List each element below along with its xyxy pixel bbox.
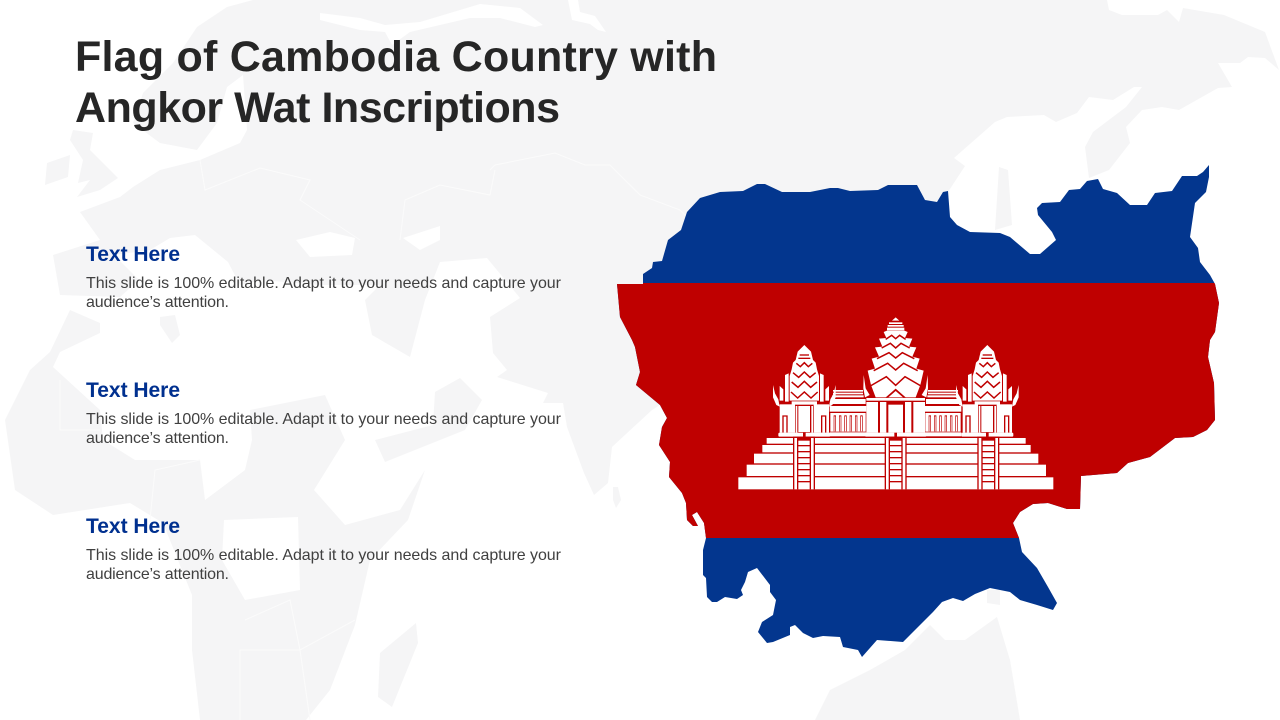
title	[75, 33, 717, 132]
icon: Angkor Wat temple	[738, 317, 1053, 489]
temple steps	[738, 438, 1053, 489]
title: Angkor Wat Inscriptions	[75, 84, 560, 132]
staircases	[793, 437, 815, 489]
text block 2: This slide is 100% editable. Adapt it to your needs and capture your	[86, 411, 562, 428]
text block 3	[86, 515, 562, 583]
white seas and borders	[60, 0, 720, 720]
text block 3: This slide is 100% editable. Adapt it to your needs and capture your	[86, 547, 562, 564]
side towers	[773, 345, 836, 437]
galleries	[830, 390, 866, 436]
text block 3: Text Here	[86, 515, 180, 538]
text block 1: audience’s attention.	[86, 294, 229, 311]
central tower	[863, 317, 928, 438]
landmass: Africa	[5, 310, 425, 720]
landmass: islands and south-east land	[45, 130, 1020, 720]
flag stripes clipped to country	[617, 165, 1219, 657]
text block 1: This slide is 100% editable. Adapt it to your needs and capture your	[86, 275, 562, 292]
text block 3: audience’s attention.	[86, 566, 229, 583]
text block 2	[86, 379, 562, 447]
Cambodia map with flag	[617, 165, 1219, 657]
landmass: Arabia	[375, 378, 482, 462]
text block 2: Text Here	[86, 379, 180, 402]
landmass: Eurasia	[53, 0, 1279, 495]
text block 1	[86, 243, 562, 311]
text block 2: audience’s attention.	[86, 430, 229, 447]
title: Flag of Cambodia Country with	[75, 33, 717, 81]
text block 1: Text Here	[86, 243, 180, 266]
